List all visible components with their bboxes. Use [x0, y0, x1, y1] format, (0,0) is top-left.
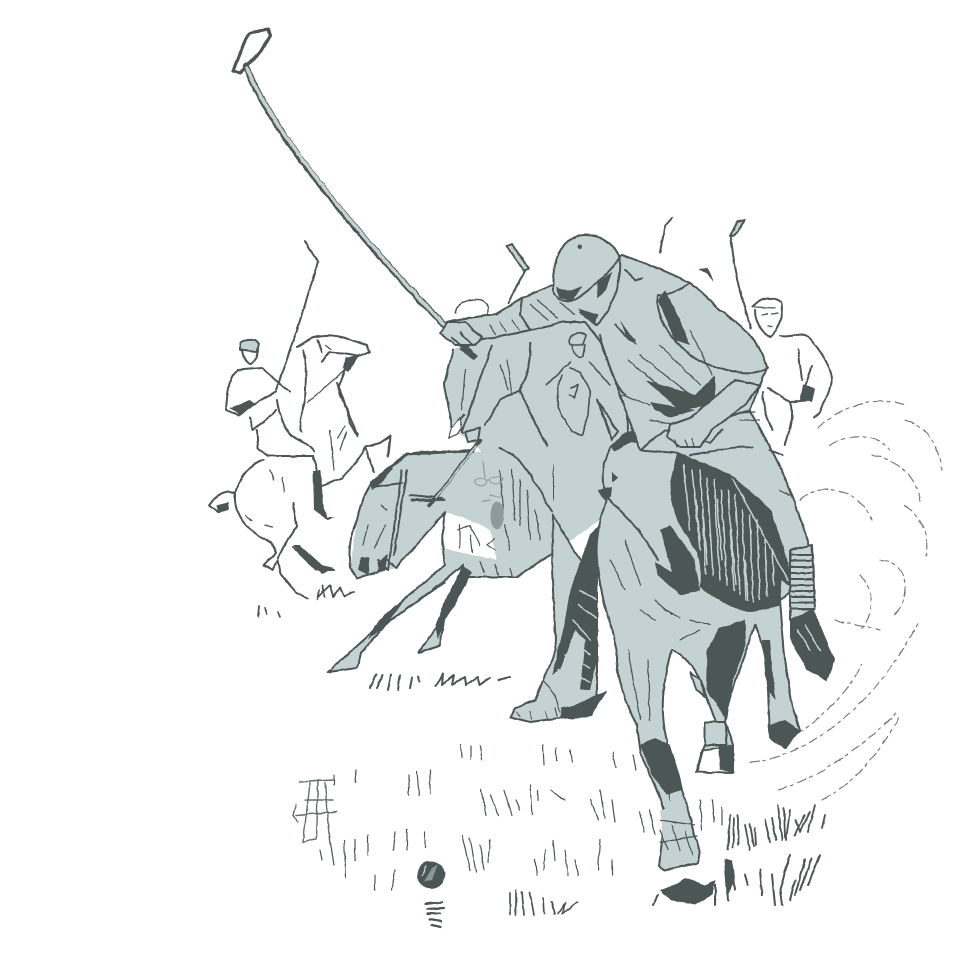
grass under back horse [370, 674, 510, 690]
rider boot [790, 545, 835, 681]
small mallets in background [507, 218, 751, 328]
horse mane [670, 450, 794, 612]
dust cloud arcs [800, 401, 942, 630]
speed arcs [750, 622, 918, 800]
middle rider torso [443, 300, 640, 553]
mallet head [233, 29, 270, 73]
horse ears [597, 388, 655, 452]
horse head detail [598, 472, 700, 595]
grass tufts [258, 585, 825, 915]
back horse reins and mallet [430, 418, 480, 505]
ball shadow [425, 902, 444, 927]
main rider far leg [510, 515, 607, 722]
small figure within rider [547, 333, 610, 435]
main rider [447, 235, 835, 681]
back horse [328, 418, 555, 672]
ball [417, 861, 445, 889]
rider breeches [690, 412, 790, 545]
rider hand on reins [667, 380, 760, 447]
left rearing horse [209, 335, 390, 596]
left rider [226, 339, 335, 520]
monogram [293, 780, 336, 842]
illustration: polo match [209, 29, 942, 927]
main horse [597, 388, 800, 870]
rider gloved hand [440, 322, 482, 360]
left rider mallet [276, 242, 318, 390]
background rider on right [753, 298, 832, 445]
scattered grass [320, 745, 722, 890]
grass near left horse [258, 585, 354, 617]
grass tuft right [653, 805, 825, 905]
rider face [578, 258, 642, 325]
grass under ball [510, 890, 578, 915]
mallet shaft [246, 66, 470, 352]
rider shirt shading [490, 283, 768, 450]
rider cap [553, 235, 620, 301]
main mallet and hand [233, 29, 482, 360]
